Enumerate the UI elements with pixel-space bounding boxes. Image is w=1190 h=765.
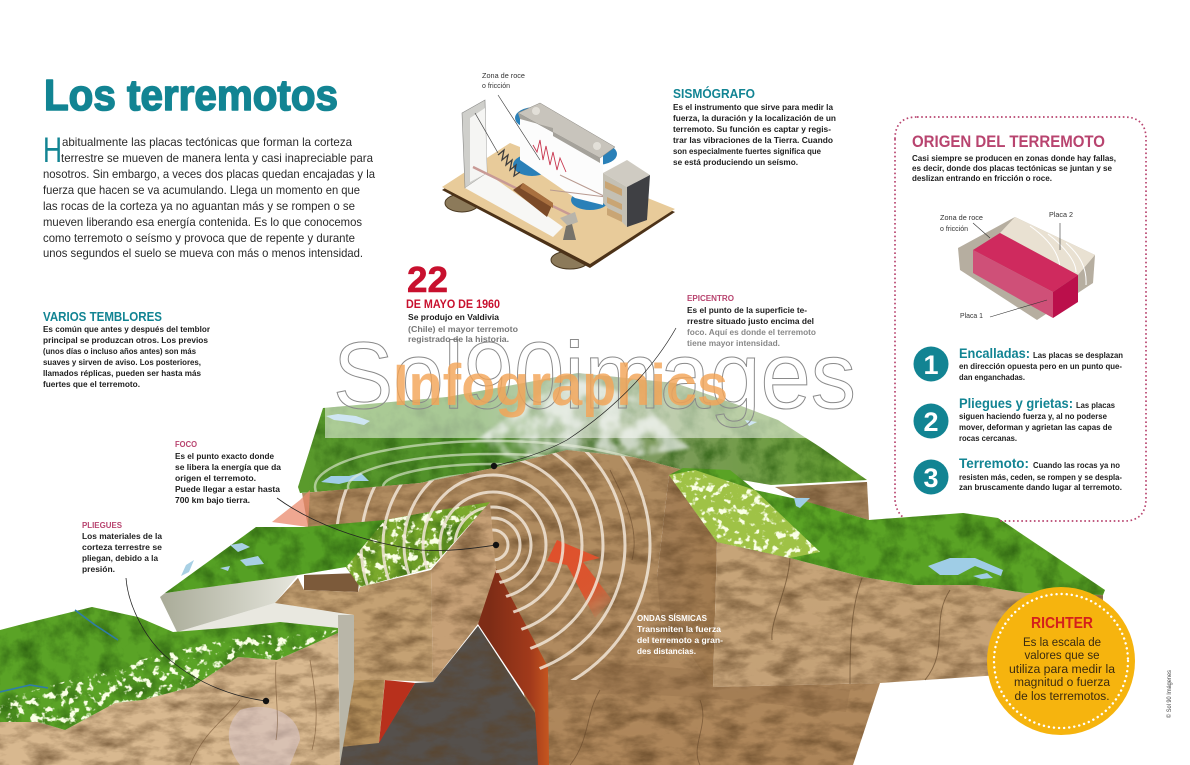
step 2: 2 [923,407,939,437]
intro text block [43,131,375,260]
pliegues callout: Los materiales de la [82,531,162,541]
pliegues callout: pliegan, debido a la [82,553,158,563]
plateau snowy mountain [470,378,690,460]
sismografo text: fuerza, la duración y la localización de un [673,113,836,123]
pliegues callout: presión. [82,564,115,574]
sismografo text: se está produciendo un seísmo. [673,157,798,167]
zona label: Zona de roce [482,71,525,80]
front block pale patches [229,707,300,765]
control box [603,160,650,187]
step 1 [914,346,1123,382]
right block left face [657,475,717,687]
board [442,146,675,268]
richter badge [987,587,1135,735]
panel dotted frame [895,117,1146,521]
shadow panel behind front block [338,615,354,765]
pliegues callout: corteza terrestre se [82,542,162,552]
step 3: Terremoto: [959,456,1029,471]
step 1: dan enganchadas. [959,372,1025,382]
intro text block: como terremoto o seísmo y provoca que de repente y durante [43,231,355,245]
step 2 [914,396,1115,443]
foco callout: se libera la energía que da [175,462,281,472]
sismografo text: Es el instrumento que sirve para medir la [673,102,833,112]
step 2: mover, deforman y agrietan las capas de [959,422,1112,432]
diagram labels [940,210,1073,320]
step 2: Pliegues y grietas: [959,396,1073,411]
foco callout: 700 km bajo tierra. [175,495,250,505]
drum paper [520,118,603,205]
seismic arrow: left [258,527,300,547]
date block: 22 de mayo de 1960: registrado de la historia. [408,334,509,344]
sismografo text [673,86,836,167]
centre block right face [431,502,496,682]
drop cap: H [43,131,62,170]
pliegues callout: PLIEGUES [82,520,122,530]
right block cracks [772,558,950,684]
foco callout: Puede llegar a estar hasta [175,484,280,494]
epicentro leader line [491,328,676,469]
intro text block: las rocas de la corteza ya no aguantan más y se rompen o se [43,199,355,213]
foco leader line [277,498,499,551]
epicentro callout: tiene mayor intensidad. [687,338,780,348]
front block snow ridge [0,630,338,730]
ondas sismicas callout [637,613,723,656]
seismograph illustration [442,71,675,269]
richter badge: RICHTER [1031,615,1093,632]
right block front face [713,542,1103,687]
seismic wave rings on rock [336,452,652,680]
intro text block: terrestre se mueven de manera lenta y casi inapreciable para [61,151,373,165]
step 3 [914,456,1122,494]
date block: 22 de mayo de 1960: Se produjo en Valdivia [408,312,499,322]
step 1: Encalladas: [959,346,1030,361]
diagram labels: o fricción [940,224,968,233]
intro text block: unos segundos el suelo se mueva con más o menos intensidad. [43,246,363,260]
foco callout: origen el terremoto. [175,473,256,483]
richter badge: magnitud o fuerza [1014,675,1110,689]
date block: 22 de mayo de 1960: 22 [407,259,448,300]
floor strip [465,173,563,237]
middle terrace lakes [181,543,264,576]
translucent watermark band [325,335,808,438]
terrain illustration [0,373,1105,765]
central earth wall [302,450,880,765]
date block: 22 de mayo de 1960 [406,259,518,344]
rivers [0,610,118,692]
richter badge: utiliza para medir la [1009,662,1115,676]
control buttons [605,181,622,222]
front block cracks [190,660,316,765]
front block green relief [0,607,338,730]
plateau lakes [321,414,757,484]
seismic trace [533,140,566,172]
panel: origen del terremoto: deslizan entrando en fricción o roce. [912,173,1052,183]
title: Los terremotos [44,71,338,120]
richter badge: valores que se [1024,648,1100,662]
foco callout: Es el punto exacto donde [175,451,274,461]
epicentro callout: rrestre situado justo encima del [687,316,814,326]
front block face [0,633,340,765]
epicentro callout: EPICENTRO [687,293,734,303]
intro text block: fuerza que hacen se va acumulando. Llega un momento en que [43,183,360,197]
dark earth band [304,573,360,592]
sismografo text: terremoto. Su función es captar y regis- [673,124,831,134]
copyright: © Sol 90 Imágenes [1166,670,1173,718]
ondas sismicas callout: Transmiten la fuerza [637,624,721,634]
watermark: Sol90images: Sol90images [333,323,856,429]
richter badge: Es la escala de [1023,635,1101,649]
right block back face [775,482,869,520]
varios temblores block [43,309,211,389]
step 1: Las placas se desplazan [1033,350,1123,360]
step 3: Cuando las rocas ya no [1033,460,1120,470]
sismografo text: SISMÓGRAFO [673,86,755,101]
intro text block: abitualmente las placas tectónicas que forman la corteza [62,135,352,149]
varios temblores block: Es común que antes y después del temblor [43,324,211,334]
epicentro callout [687,293,816,348]
right block grassy top [669,468,1105,595]
step 2: siguen haciendo fuerza y, al no poderse [959,411,1107,421]
back plateau [298,373,867,493]
lower block under centre [340,678,385,747]
pliegues callout [82,520,162,574]
sismografo text: son especialmente fuertes significa que [673,146,821,156]
step 2: Las placas [1076,400,1115,410]
middle terrace grey side [160,575,298,632]
step 1: en dirección opuesta pero en un punto que- [959,361,1122,371]
varios temblores block: llamados réplicas, pueden ser hasta más [43,368,201,378]
seismic wave rings on plateau [314,440,632,492]
epicentro callout: foco. Aquí es donde el terremoto [687,327,816,337]
pale backdrop [177,603,354,632]
anvil [560,212,578,226]
step 3: resisten más, ceden, se rompen y se despla- [959,472,1122,482]
diagram labels: Placa 2 [1049,210,1073,219]
middle terrace green [165,510,440,593]
panel heading: ORIGEN DEL TERREMOTO [912,132,1105,151]
rock strata band [548,664,850,712]
date block: 22 de mayo de 1960: (Chile) el mayor terremoto [408,324,518,334]
richter badge: de los terremotos. [1014,689,1110,703]
red inner wall [379,680,415,743]
epicentro callout: Es el punto de la superficie te- [687,305,807,315]
brown weight [513,183,553,217]
cave floor [340,626,540,765]
top bar [518,103,615,158]
pointer arms [550,175,606,197]
panel: origen del terremoto: es decir, donde dos placas tectónicas se juntan y se [912,163,1112,173]
red fault wall [478,563,549,765]
pliegues leader line [126,578,269,704]
ondas sismicas callout: del terremoto a gran- [637,635,723,645]
diagram labels: Placa 1 [960,311,983,320]
earth wall cracks [570,470,703,765]
foco callout [175,439,281,505]
drum discs [515,107,555,129]
intro text block: nosotros. Sin embargo, a veces dos placas quedan encajadas y la [43,167,375,181]
step 3: zan bruscamente dando lugar al terremoto. [959,482,1122,492]
ondas sismicas callout: ONDAS SÍSMICAS [637,613,707,623]
varios temblores block: fuertes que el terremoto. [43,379,140,389]
centre block front face [275,570,433,682]
feet [445,194,479,212]
spring [498,150,520,176]
back wall [462,100,487,188]
ondas sismicas callout: des distancias. [637,646,696,656]
tectonic plate diagram [958,217,1095,320]
rod [473,167,575,217]
right block lakes [794,498,1003,579]
seismograph illustration: o fricción [482,81,510,90]
panel: origen del terremoto [895,117,1146,521]
panel intro: Casi siempre se producen en zonas donde hay fallas, [912,153,1116,163]
sismografo text: trar las vibraciones de la Tierra. Cuando [673,135,833,145]
varios temblores block: principal se produzcan otros. Los previos [43,335,208,345]
step 2: rocas cercanas. [959,433,1017,443]
intro text block: mueven liberando esa energía contenida. Es lo que conocemos [43,215,362,229]
varios temblores block: (unos días o incluso años antes) son más [43,346,196,356]
date block: 22 de mayo de 1960: DE MAYO DE 1960 [406,297,500,311]
right block snowy ridge [669,470,820,558]
watermark: Infographics: Infographics [393,353,728,418]
step 3: 3 [923,463,939,493]
varios temblores block: VARIOS TEMBLORES [43,309,162,324]
centre block mountain top [346,502,490,587]
varios temblores block: suaves y sirven de aviso. Los posteriores, [43,357,201,367]
seismic arrow: main [547,540,612,618]
foco callout: FOCO [175,439,197,449]
diagram labels: Zona de roce [940,213,983,222]
step 1: 1 [923,350,939,380]
